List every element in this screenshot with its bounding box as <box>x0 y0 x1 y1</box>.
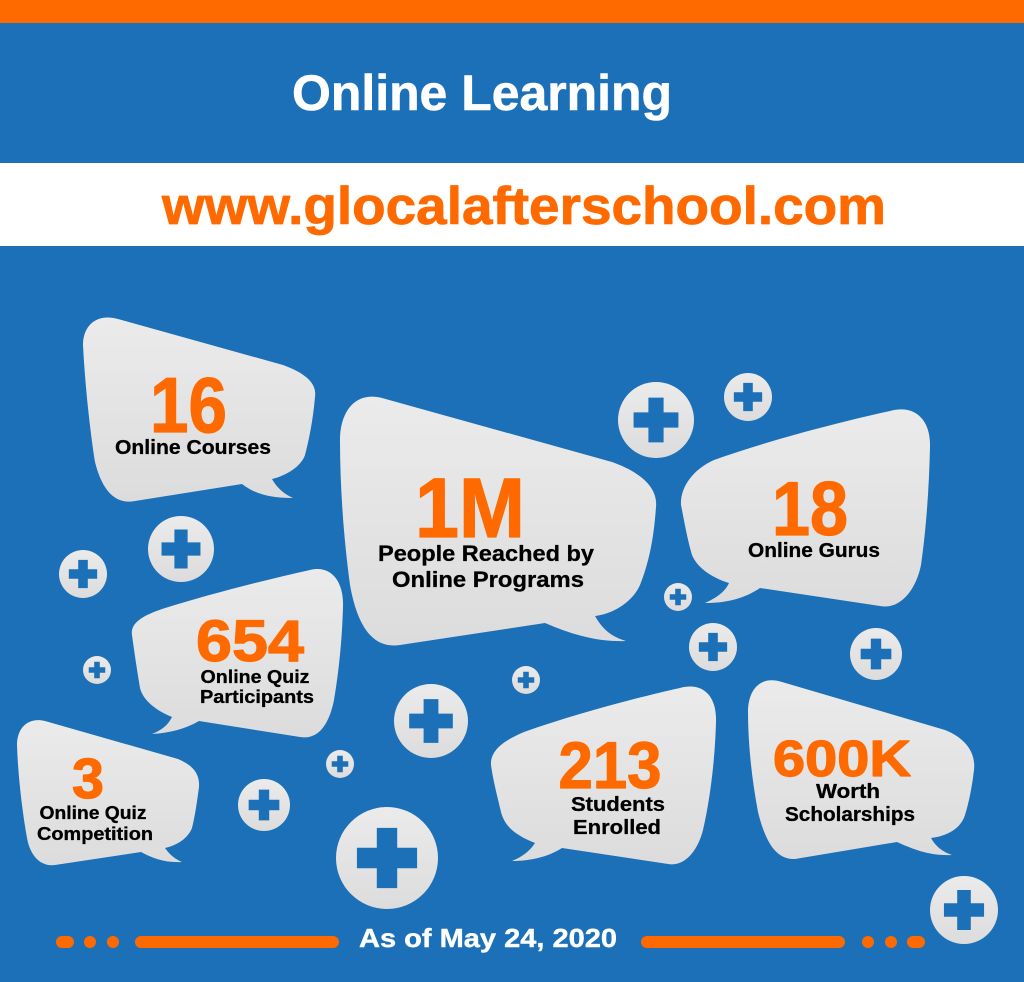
website banner: www.glocalafterschool.com <box>161 177 886 236</box>
icon: plus 14 <box>930 876 998 944</box>
icon: plus 7 <box>689 623 737 671</box>
bubble: 654 quiz participants <box>132 569 343 737</box>
bubble: 213 students enrolled: Students <box>571 794 665 816</box>
title: Online Learning <box>292 65 672 121</box>
bubble: 654 quiz participants: Online Quiz <box>200 667 310 687</box>
icon: plus 5 <box>83 656 111 684</box>
icon: plus 9 <box>512 666 540 694</box>
icon: plus 10 <box>394 684 468 758</box>
top orange band <box>0 0 1024 23</box>
bubble: 3 quiz competition: Online Quiz <box>40 803 146 823</box>
icon: plus 12 <box>238 779 290 831</box>
bubble: 3 quiz competition: Competition <box>37 824 153 844</box>
plus icons <box>59 373 998 944</box>
bubble: 18 online gurus: Online Gurus <box>748 540 880 562</box>
bubble: 600K scholarships: 600K <box>773 730 911 787</box>
footer decorative left <box>56 936 339 948</box>
bubble: 18 online gurus: 18 <box>772 467 848 552</box>
bubble: 1M people reached: 1M <box>415 461 525 555</box>
bubble: 3 quiz competition: 3 <box>72 747 104 811</box>
bubble: 213 students enrolled: Enrolled <box>573 817 661 839</box>
icon: plus 1 <box>618 382 694 458</box>
bubble: 600K scholarships <box>748 680 974 859</box>
bubble: 1M people reached: Online Programs <box>392 567 584 592</box>
icon: plus 8 <box>850 628 902 680</box>
icon: plus 11 <box>326 750 354 778</box>
icon: plus 6 <box>664 583 692 611</box>
footer date: As of May 24, 2020 <box>359 923 617 953</box>
icon: plus 4 <box>59 550 107 598</box>
bubble: 16 online courses: Online Courses <box>115 437 271 459</box>
footer decorative right <box>641 936 925 948</box>
bubble: 18 online gurus <box>681 409 930 607</box>
icon: plus 3 <box>148 516 214 582</box>
website banner <box>0 163 1024 246</box>
icon: plus 2 <box>724 373 772 421</box>
bubble: 16 online courses: 16 <box>150 361 227 449</box>
bubble: 1M people reached <box>340 397 656 646</box>
bubble: 1M people reached: People Reached by <box>378 541 595 566</box>
bubble: 16 online courses <box>83 317 315 502</box>
bubble: 3 quiz competition <box>17 720 199 865</box>
bubble: 600K scholarships: Worth <box>816 781 880 803</box>
bubble: 213 students enrolled: 213 <box>558 728 662 802</box>
bubble: 654 quiz participants: 654 <box>196 609 304 674</box>
icon: plus 13 <box>336 807 438 909</box>
bubble: 654 quiz participants: Participants <box>200 687 314 707</box>
bubble: 600K scholarships: Scholarships <box>785 804 915 826</box>
bubble: 213 students enrolled <box>491 687 716 864</box>
